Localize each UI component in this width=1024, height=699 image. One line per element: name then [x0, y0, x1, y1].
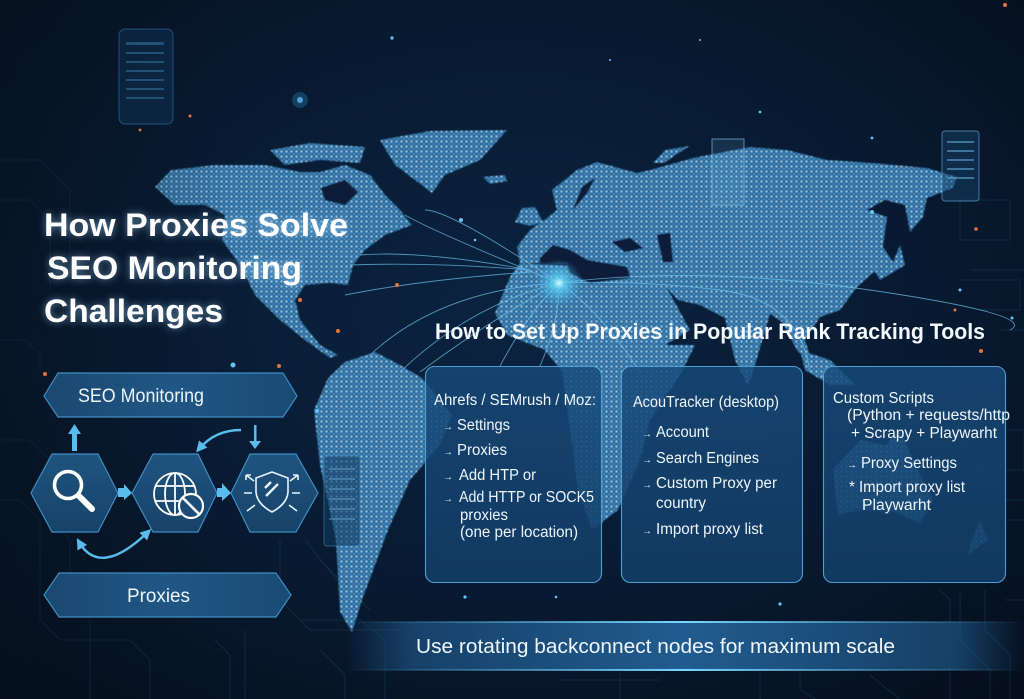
banner: SEO Monitoring: [44, 373, 297, 417]
panel: Custom Scripts: Playwarht: [862, 497, 932, 514]
panel: Ahrefs SEMrush Moz: →: [443, 472, 453, 483]
heading: setup section: How to Set Up Proxies in Popular Rank Tracking Tools: [435, 319, 985, 344]
icon: server rack top left: [119, 29, 173, 124]
panel: AcouTracker: Custom Proxy per: [656, 475, 777, 492]
arrow: up to SEO Monitoring: [68, 424, 81, 451]
title: SEO Monitoring: [47, 250, 302, 286]
panel: Custom Scripts: →: [847, 460, 857, 471]
panel: Custom Scripts: (Python + requests/http: [847, 407, 1010, 424]
title: [44, 207, 348, 329]
arrow: curved from banner to globe hexagon: [199, 430, 241, 449]
arrow: search to globe: [118, 484, 132, 500]
banner: Proxies: Proxies: [127, 586, 190, 607]
panel: Ahrefs SEMrush Moz: Proxies: [457, 442, 507, 459]
hexagon: search: [31, 454, 118, 532]
panel: Custom Scripts: Proxy Settings: [861, 455, 957, 472]
icon: translucent card on map: [712, 139, 744, 205]
panel: Custom Scripts: *: [849, 479, 855, 496]
panel: Ahrefs SEMrush Moz: Add HTP or: [459, 467, 536, 484]
banner: SEO Monitoring: SEO Monitoring: [78, 386, 204, 407]
panel: Ahrefs SEMrush Moz: →: [443, 447, 453, 458]
panel: AcouTracker: →: [642, 429, 652, 440]
panel: Ahrefs SEMrush Moz: (one per location): [460, 524, 578, 541]
callout: footer tip: Use rotating backconnect nodes for maximum scale: [416, 636, 895, 658]
title: Challenges: [44, 293, 223, 329]
panel: Custom Scripts: + Scrapy + Playwarht: [851, 425, 998, 442]
panel: Ahrefs SEMrush Moz: Add HTTP or SOCK5: [459, 489, 594, 506]
panel: Ahrefs SEMrush Moz: Ahrefs / SEMrush / Moz:: [434, 392, 596, 409]
icon: magnifying glass: [54, 472, 92, 509]
arrow: curved loop between search and globe: [79, 532, 148, 558]
map: hub star: [535, 259, 583, 307]
panel: AcouTracker: Search Engines: [656, 450, 759, 467]
circuit board traces: [0, 160, 1024, 699]
panel: AcouTracker: Import proxy list: [656, 521, 764, 538]
banner: Proxies: [44, 573, 291, 617]
map: continents: [155, 130, 988, 632]
panel: Custom Scripts: Import proxy list: [859, 479, 966, 496]
hexagon: shield: [231, 454, 318, 532]
callout: footer tip: [345, 621, 1024, 671]
panel: Custom Scripts: Custom Scripts: [833, 390, 934, 407]
icon: shield with arrows: [244, 472, 300, 512]
panel: Ahrefs SEMrush Moz: proxies: [460, 507, 508, 524]
title: How Proxies Solve: [44, 207, 348, 243]
panel: AcouTracker: AcouTracker (desktop): [633, 394, 779, 411]
panel: Ahrefs SEMrush Moz: Settings: [457, 417, 510, 434]
icon: globe with block sign: [154, 473, 203, 518]
panel: Ahrefs SEMrush Moz: [426, 366, 602, 582]
left fade: [0, 0, 230, 699]
panel: AcouTracker: Account: [656, 424, 710, 441]
panel: AcouTracker: →: [642, 480, 652, 491]
world map: [155, 130, 1014, 632]
map: connection arcs: [345, 210, 1014, 372]
hexagon: blocked globe: [132, 454, 217, 532]
panel: AcouTracker: [622, 366, 802, 582]
icon: server rack middle left: [324, 456, 360, 546]
icon: server rack right: [942, 131, 979, 201]
panel: AcouTracker: →: [642, 526, 652, 537]
panel: Ahrefs SEMrush Moz: →: [443, 422, 453, 433]
panel: AcouTracker: →: [642, 455, 652, 466]
arrow: globe to shield: [217, 483, 231, 501]
panel: AcouTracker: country: [656, 495, 706, 512]
map: inland seas: [321, 178, 673, 283]
arrow: down into shield hexagon: [249, 425, 261, 449]
panel: Ahrefs SEMrush Moz: →: [443, 494, 453, 505]
panel: Custom Scripts: [824, 366, 1010, 582]
